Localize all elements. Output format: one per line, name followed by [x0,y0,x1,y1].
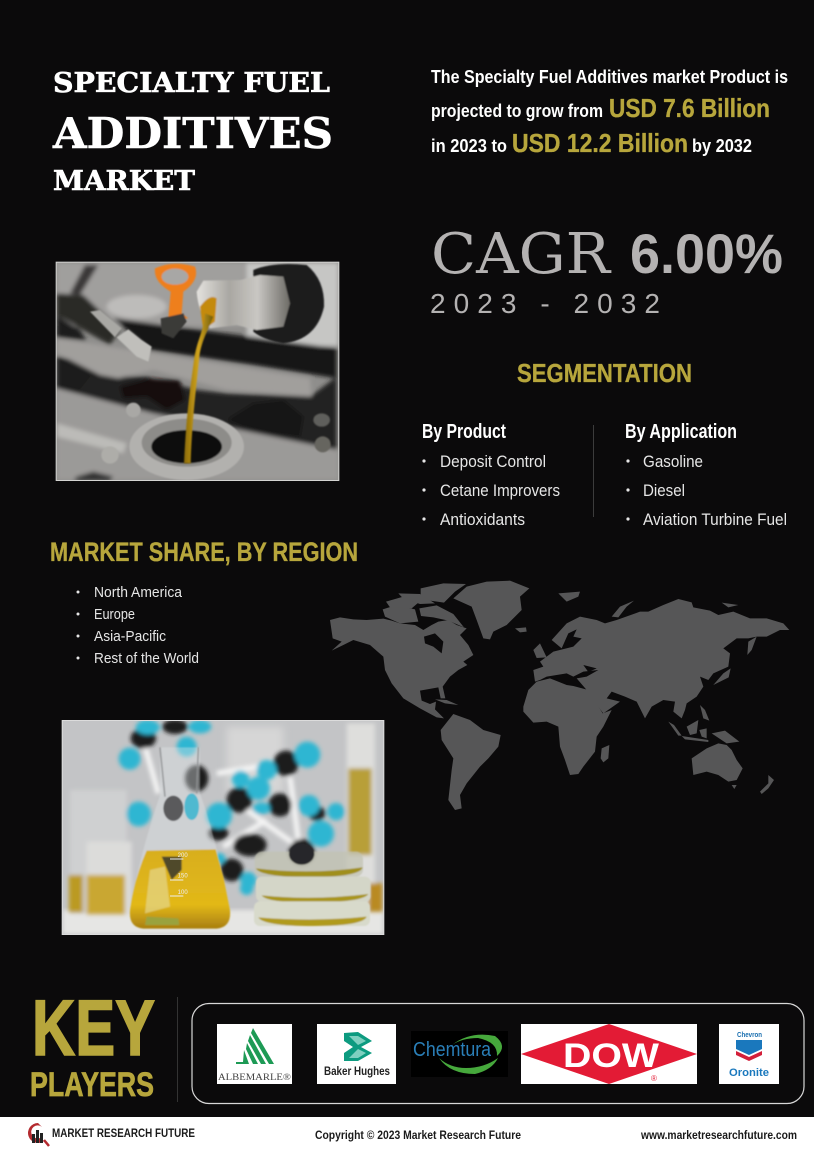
photo: chemistry flask and molecules: 150 [178,874,188,880]
logo: Chevron Oronite: Chevron [737,1032,762,1039]
segmentation: by product [422,421,560,529]
segmentation: by product: Cetane Improvers [440,481,560,500]
key players panel [192,1004,804,1104]
region list: North America [94,584,183,601]
logo: Albemarle [217,1024,292,1084]
segmentation: by application: Gasoline [643,452,703,471]
CAGR figure: CAGR [431,222,612,287]
segmentation: by application: Aviation Turbine Fuel [643,510,787,529]
title: SPECIALTY FUEL [53,68,330,99]
title [52,68,333,197]
segmentation: by application [625,421,787,529]
market forecast text: USD 12.2 Billion [512,128,688,158]
heading: segmentation: SEGMENTATION [517,358,692,388]
footer: MARKET RESEARCH FUTURE [52,1126,195,1140]
market forecast text: projected to grow from [431,101,603,121]
region list: Europe [94,606,135,623]
region list: Rest of the World [94,650,199,667]
logo: Dow: ® [651,1074,657,1083]
heading: market share by region: MARKET SHARE, BY REGION [50,537,358,567]
logo: Chevron Oronite: Oronite [729,1067,769,1079]
region list [76,584,199,667]
heading: key players: PLAYERS [30,1066,154,1104]
footer: Copyright © 2023 Market Research Future [315,1128,521,1142]
CAGR figure: 2023 - 2032 [430,288,660,319]
segmentation: by application: Diesel [643,481,685,500]
footer [0,1117,814,1150]
CAGR figure: 6.00% [630,222,783,285]
heading: key players [30,983,155,1104]
heading: key players: KEY [32,983,155,1072]
segmentation: by product: Deposit Control [440,452,546,471]
logo: Dow: DOW [563,1037,660,1075]
photo: chemistry flask and molecules [62,719,384,935]
logo: Chemtura: Chemtura [413,1039,492,1061]
photo: oil pouring into engine [56,262,339,481]
segmentation: by application: By Application [625,421,737,443]
market forecast text: by 2032 [692,136,752,156]
photo: chemistry flask and molecules: 200 [178,853,188,859]
market forecast text: USD 7.6 Billion [609,93,770,123]
title: MARKET [53,166,195,197]
footer logo [28,1123,49,1146]
region list: Asia-Pacific [94,628,166,645]
market forecast text: in 2023 to [431,136,507,156]
photo: chemistry flask and molecules: 100 [178,890,188,896]
logo: Chevron Oronite [719,1024,779,1084]
logo: Chemtura [411,1031,508,1077]
world map [330,581,789,810]
logo: Dow [521,1024,697,1084]
title: ADDITIVES [52,109,333,158]
CAGR figure [430,222,783,319]
market forecast text [431,67,788,158]
segmentation: by product: By Product [422,421,506,443]
logo: Baker Hughes: Baker Hughes [324,1064,390,1078]
logo: Baker Hughes [317,1024,396,1084]
segmentation: by product: Antioxidants [440,510,525,529]
logo: Albemarle: ALBEMARLE® [218,1072,291,1082]
